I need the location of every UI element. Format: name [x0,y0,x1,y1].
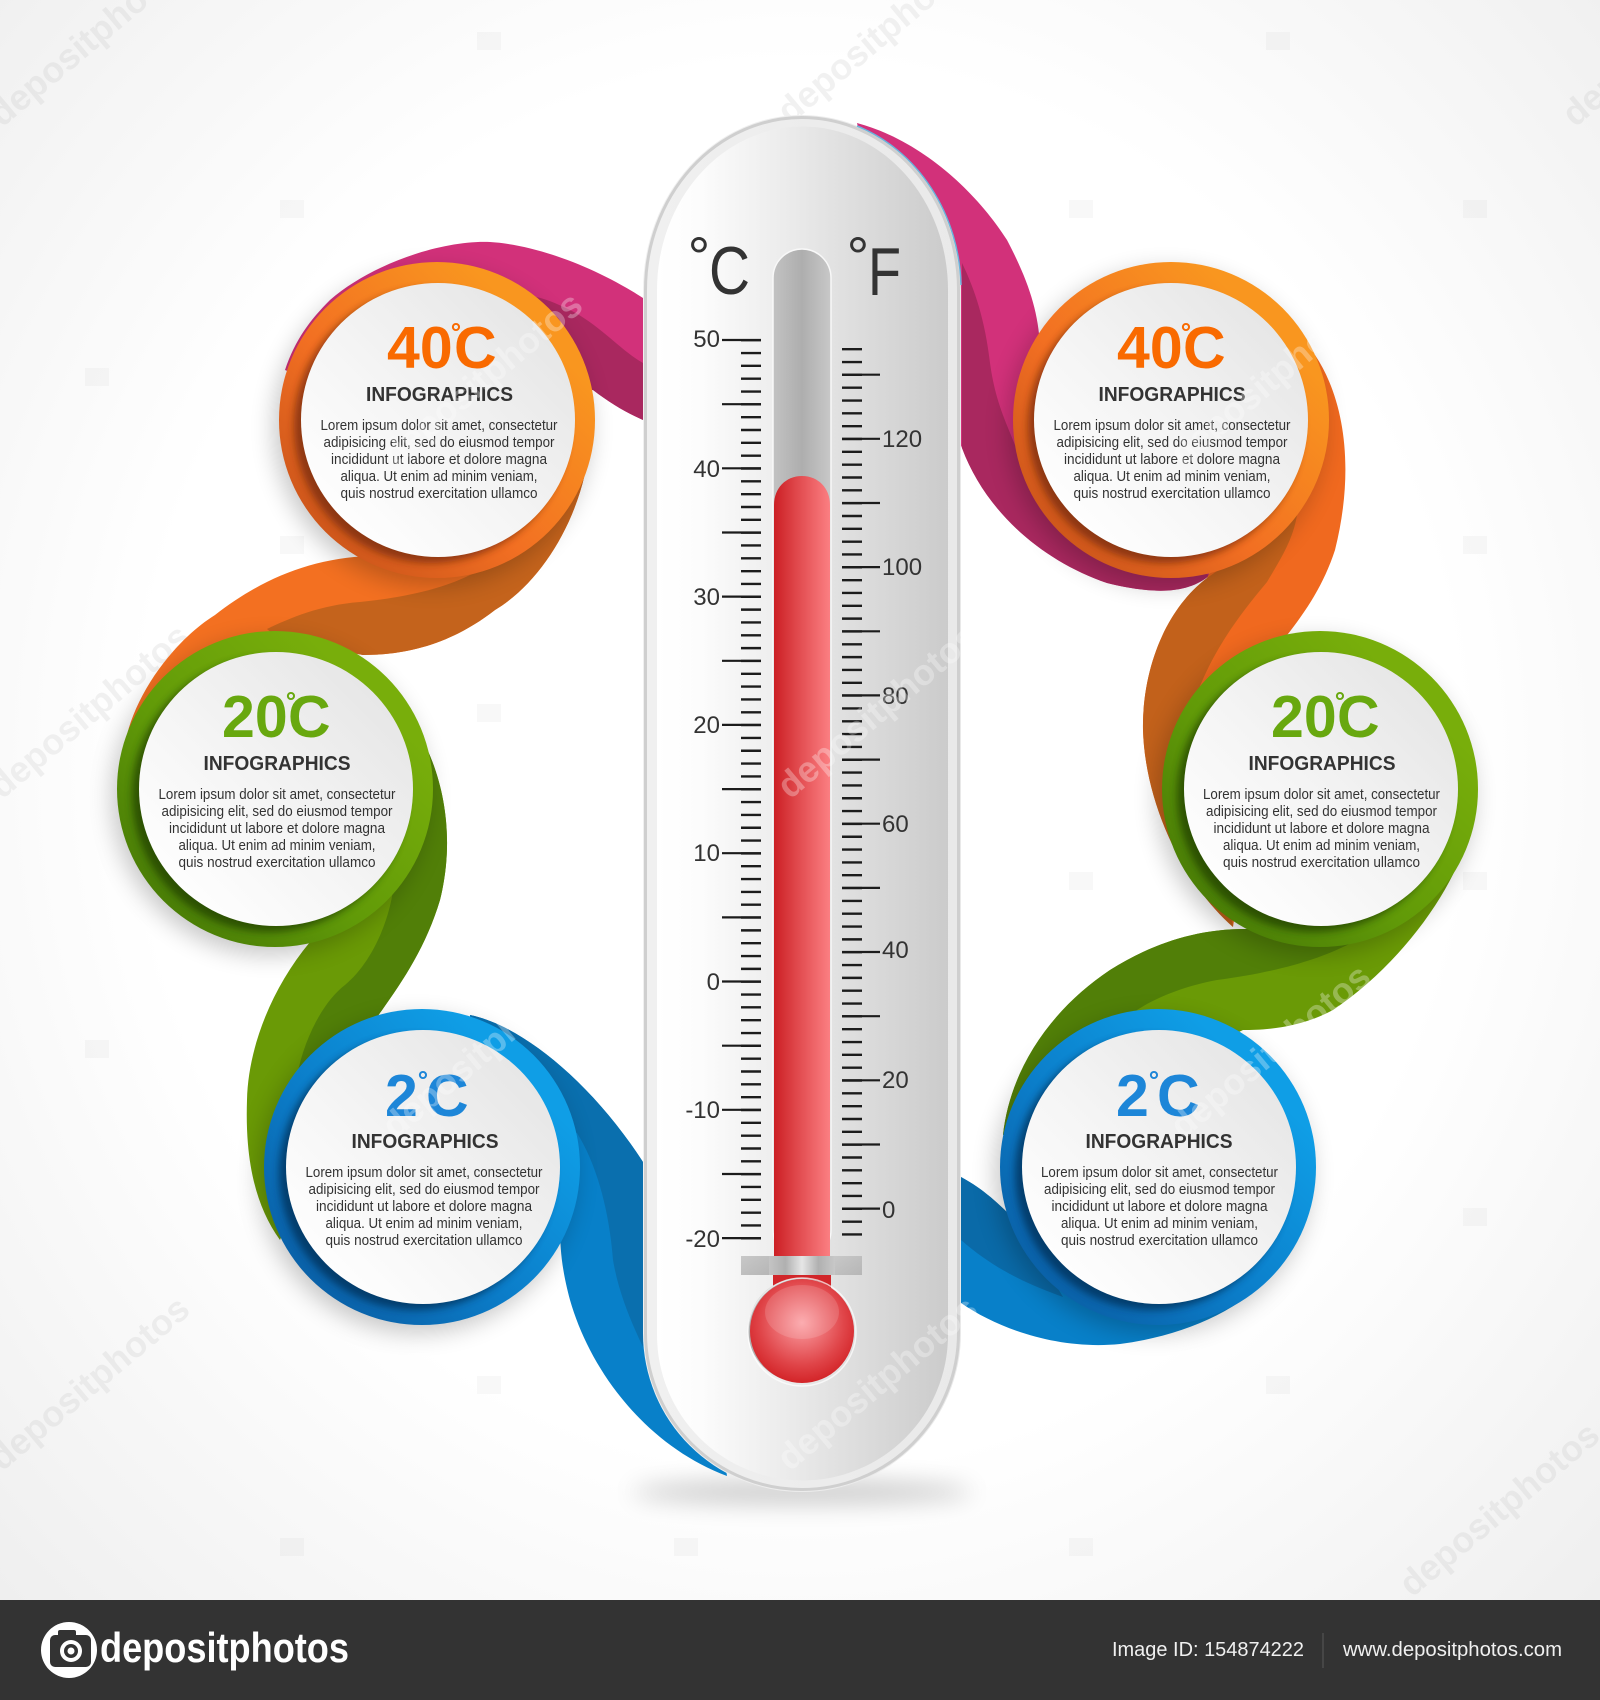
unit label: Celsius: C [709,233,750,309]
temperature: 40 [1117,315,1183,381]
body: incididunt ut labore et dolore magna [1064,452,1281,468]
logo icon: camera [41,1622,97,1678]
watermarks over artwork [374,283,1378,1478]
ribbon: magenta left [285,242,643,420]
ribbon: green left [247,735,447,1240]
body: quis nostrud exercitation ullamco [1061,1233,1258,1249]
heading: INFOGRAPHICS [1086,1131,1232,1153]
watermarks over artwork: depositphotos [1162,955,1378,1146]
temperature: C [426,1063,469,1129]
body: adipisicing elit, sed do eiusmod tempor [1044,1182,1275,1198]
ring [264,1009,580,1325]
ring [1162,631,1478,947]
temperature: ° [1149,1065,1159,1095]
Fahrenheit labels: 20 [882,1067,909,1094]
temperature [385,1063,469,1129]
temperature: ° [451,317,461,347]
footer banner [0,1600,1600,1700]
thermometer body [643,115,961,1492]
body: incididunt ut labore et dolore magna [1214,821,1430,837]
body: quis nostrud exercitation ullamco [326,1233,522,1249]
body: aliqua. Ut enim ad minim veniam, [326,1216,522,1232]
temperature: 20 [1271,684,1337,750]
glass tube [773,249,831,1259]
temperature: ° [286,686,296,716]
Fahrenheit labels [882,426,922,1224]
Fahrenheit labels: 80 [882,683,909,710]
temperature: 20 [222,684,288,750]
temperature: ° [418,1065,428,1095]
body: aliqua. Ut enim ad minim veniam, [1074,469,1270,485]
Fahrenheit labels: 40 [882,937,909,964]
unit label: Celsius: ° [688,225,710,288]
unit label: Celsius [688,225,750,309]
Celsius scale [722,339,761,1240]
body: adipisicing elit, sed do eiusmod tempor [1056,435,1288,451]
Fahrenheit labels: 120 [882,426,922,453]
unit label: Fahrenheit: F [868,234,901,310]
temperature: ° [1335,686,1345,716]
body: Lorem ipsum dolor sit amet, consectetur [306,1165,543,1181]
Fahrenheit labels: 0 [882,1197,895,1224]
temperature: ° [1181,317,1191,347]
image id: Image ID: 154874222 [1112,1639,1304,1661]
body: incididunt ut labore et dolore magna [331,452,548,468]
disc [286,1030,560,1304]
Celsius labels: 40 [693,456,720,483]
bulb [748,1275,856,1386]
ribbon: orange left [127,440,590,735]
temperature: C [1157,1063,1200,1129]
body [320,418,558,502]
Celsius labels: 30 [693,584,720,611]
ring [1013,262,1329,578]
metal band [741,1256,862,1275]
Celsius labels: -20 [685,1226,720,1253]
body [158,787,396,871]
thermometer [643,115,961,1492]
body: aliqua. Ut enim ad minim veniam, [1061,1216,1258,1232]
ring [1000,1009,1316,1325]
circle: 2C right [995,1009,1316,1333]
temperature: 2 [385,1063,418,1129]
Celsius labels: 10 [693,840,720,867]
ribbon: green right [1003,830,1470,1135]
body: Lorem ipsum dolor sit amet, consectetur [1041,1165,1278,1181]
body: incididunt ut labore et dolore magna [169,821,386,837]
disc [1022,1030,1296,1304]
disc [1034,283,1308,557]
body: Lorem ipsum dolor sit amet, consectetur [320,418,558,434]
temperature [222,684,331,750]
body: quis nostrud exercitation ullamco [1223,855,1420,871]
Celsius labels: 20 [693,712,720,739]
floor shadow of thermometer [632,1480,972,1504]
Celsius labels [685,326,720,1253]
heading: INFOGRAPHICS [352,1131,498,1153]
Fahrenheit labels: 100 [882,554,922,581]
body: adipisicing elit, sed do eiusmod tempor [1206,804,1437,820]
temperature [1271,684,1380,750]
watermarks over artwork: depositphotos [769,615,985,806]
Celsius labels: -10 [685,1097,720,1124]
watermarks over artwork: depositphotos [374,955,590,1146]
circle: 2C left [259,1009,580,1333]
body: Lorem ipsum dolor sit amet, consectetur [1203,787,1440,803]
body [1054,418,1291,502]
website: www.depositphotos.com [1342,1639,1562,1661]
unit label: Fahrenheit: ° [847,225,869,288]
ribbon: blue right [961,1177,1280,1345]
body [1203,787,1440,871]
ribbons [127,123,1470,1476]
temperature [387,315,497,381]
body: adipisicing elit, sed do eiusmod tempor [324,435,555,451]
temperature: C [1337,684,1380,750]
temperature: C [1183,315,1226,381]
logo wordmark: depositphotos [100,1624,349,1671]
circle: 20C right [1157,631,1478,955]
heading: INFOGRAPHICS [1248,753,1396,775]
body: aliqua. Ut enim ad minim veniam, [340,469,538,485]
body: incididunt ut labore et dolore magna [1052,1199,1268,1215]
body: aliqua. Ut enim ad minim veniam, [178,838,376,854]
body: Lorem ipsum dolor sit amet, consectetur [158,787,396,803]
body: incididunt ut labore et dolore magna [316,1199,533,1215]
ring [279,262,595,578]
body: quis nostrud exercitation ullamco [340,486,538,502]
disc [1184,652,1458,926]
Celsius labels: 0 [707,969,720,996]
heading: INFOGRAPHICS [366,384,513,406]
disc [301,283,575,557]
body: Lorem ipsum dolor sit amet, consectetur [1054,418,1291,434]
circle: 40C left [274,262,595,586]
ribbon: orange right [1143,355,1345,927]
heading: INFOGRAPHICS [1098,384,1246,406]
temperature: C [454,315,497,381]
body: adipisicing elit, sed do eiusmod tempor [308,1182,540,1198]
temperature: 2 [1116,1063,1149,1129]
ribbon: magenta right [857,123,1210,591]
body: aliqua. Ut enim ad minim veniam, [1223,838,1420,854]
red mercury column [774,476,830,1310]
temperature [1117,315,1226,381]
Fahrenheit labels: 60 [882,811,909,838]
Fahrenheit scale [842,348,880,1236]
watermarks over artwork: depositphotos [374,283,590,474]
Celsius labels: 50 [693,326,720,353]
heading: INFOGRAPHICS [204,753,350,775]
disc [139,652,413,926]
body: adipisicing elit, sed do eiusmod tempor [162,804,393,820]
circle: 40C right [1008,262,1329,586]
circle: 20C left [112,631,433,955]
temperature [1116,1063,1200,1129]
body: quis nostrud exercitation ullamco [178,855,376,871]
body [1041,1165,1278,1249]
watermarks over artwork: depositphotos [1162,283,1378,474]
ring [117,631,433,947]
temperature: C [288,684,331,750]
body: quis nostrud exercitation ullamco [1074,486,1270,502]
body [306,1165,543,1249]
temperature: 40 [387,315,453,381]
watermarks over artwork: depositphotos [769,1287,985,1478]
unit label: Fahrenheit [847,225,901,310]
ribbon: blue left [470,1015,727,1476]
